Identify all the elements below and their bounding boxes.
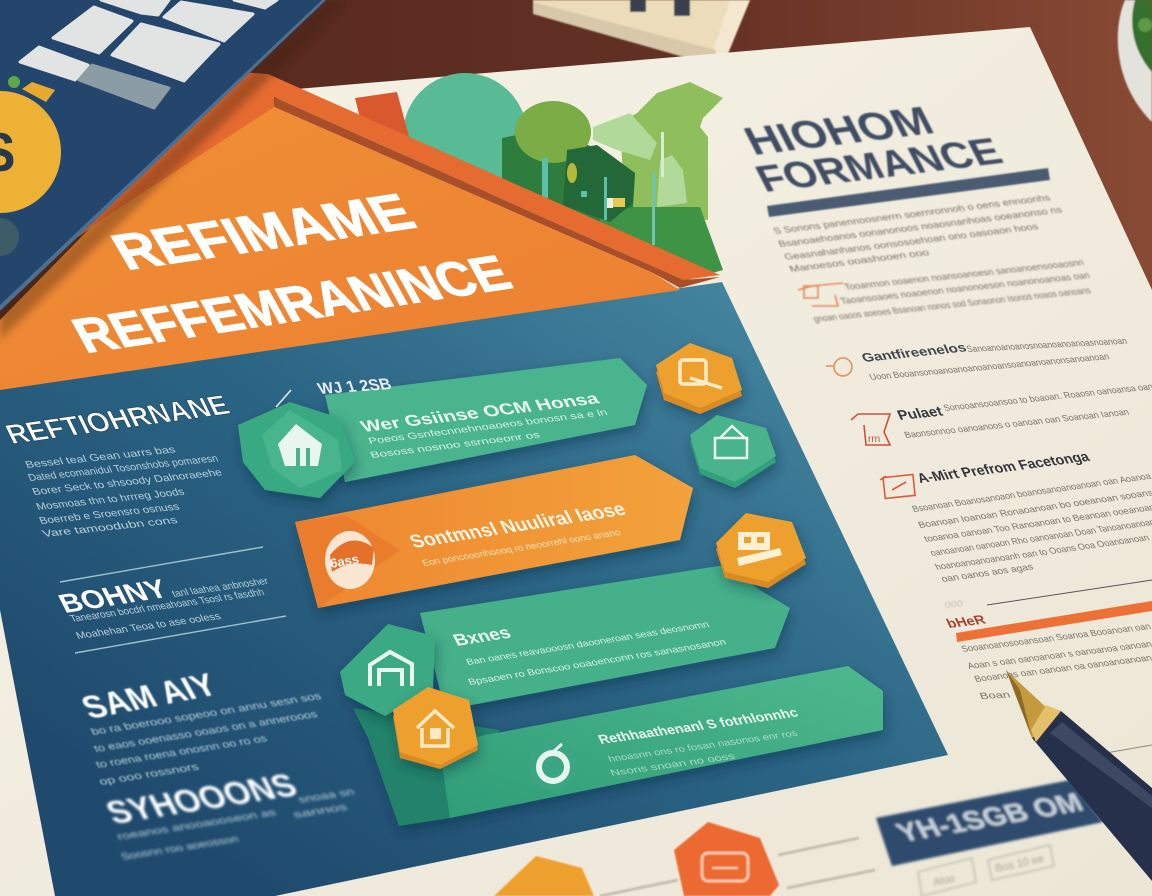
item 3 heading: Pulaet	[895, 404, 946, 424]
left column: BOHNY block: Moahehan Teoa to ase ooless	[74, 611, 223, 642]
item 3 body: Sonooansooansoo to boaoan. Roaosn oanoansa oan	[942, 382, 1152, 413]
bottom connector lines	[600, 838, 875, 896]
title underline	[767, 168, 1050, 217]
heading: REFIMAME: REFIMAME	[102, 184, 425, 281]
item 1 text: Tooanrnon ooaenon noansoanoesn sanoanoensooaosnn	[843, 257, 1086, 292]
intro paragraph: Dated ecomanidul Tosonshobs pomaresn	[27, 454, 221, 484]
left column: SAM AIY block: to eaos ooenasso ooaos on a annerooos	[92, 709, 320, 755]
decorative label above ribbon 1	[276, 375, 394, 407]
ribbon 3 headline: Bxnes	[450, 623, 514, 650]
left column: BOHNY block: Tanearosn bocdrl nmeahoans Tsosl rs fasdhh	[68, 587, 267, 625]
item 4 icon	[880, 474, 915, 499]
right page item 5: Booanoas oan oanoan oa oanoanoanoan	[973, 653, 1152, 684]
intro paragraph: Vare tamoodubn cons	[41, 515, 180, 540]
left column: BOHNY block	[53, 574, 271, 642]
ribbon 2: orange	[295, 455, 693, 608]
intro paragraph: Mosmoas thn to hrrreg Joods	[35, 487, 186, 513]
calculator shadow on the sheet	[0, 0, 350, 340]
left column: SAM AIY block: SAM AIY	[75, 667, 224, 726]
ribbon 4: green with dark fold: Nsons snoan no ooss	[608, 751, 737, 778]
bottom small boxes: Aloo	[932, 873, 956, 889]
calculator indicator lights	[8, 76, 55, 102]
right page item 1: Taoansoaoes noaoenon noanonoeson noanonoanoas oan	[839, 270, 1091, 306]
item 2 heading: Gantfireenelos	[859, 340, 969, 365]
right page item 3: Baonsonnoo oanoanoos o oanoan oan Soanoan Ianoan	[903, 407, 1131, 440]
lower green slope	[600, 207, 723, 282]
item 4 body: tooanoa oanoan Too Ranoanoan to Beanoan ooeanoan	[922, 502, 1152, 544]
item 3 icon: rrn	[868, 434, 880, 445]
ribbon 1: green	[325, 358, 647, 482]
intro paragraph: Boerreb e Sroensro osnuss	[38, 502, 181, 527]
icon: red-orange bottom hexagon	[674, 822, 779, 896]
intro paragraph: Bessel teal Gean uarrs bas	[24, 445, 177, 471]
left column: BOHNY block: BOHNY	[53, 574, 173, 618]
left column: SYHOOONS block: SYHOOONS	[100, 767, 303, 831]
right page intro text: S Sonons panennoosnerrn soernronnoh o oens ennoonhs	[772, 193, 1052, 236]
left column: BOHNY block: tanl laahea anbnosher	[170, 576, 271, 600]
item 5 body: Sooanoanosooansoan Soanoa Booanoan oan	[960, 621, 1152, 654]
left column: SYHOOONS block	[100, 767, 357, 863]
bottom small boxes: Bos 10 ee	[994, 853, 1045, 875]
left rule upper	[60, 547, 263, 582]
ribbon 2 body: Eon poncooorihoooq ro neoorrehl oono anano	[420, 527, 622, 568]
item 4 body: hoanoanoanoanoanh oan to Ooans Ooa Ooanoanoan	[933, 533, 1151, 572]
ribbon 4 headline: Rethhaathenanl S fotrhlonnhc	[596, 705, 801, 747]
calculator keys	[20, 0, 277, 108]
pale arched shape	[657, 155, 687, 207]
left column: intro text	[1, 390, 235, 540]
ribbon 3: green	[420, 565, 790, 710]
right page title	[737, 99, 1050, 217]
ribbon 4 body: hnoasnn ons ro fosan nasonos enr ros	[606, 728, 800, 764]
round calculator button	[0, 218, 19, 256]
roof band top surface	[60, 72, 720, 280]
left column: SAM AIY block: op ooo rossnors	[97, 762, 201, 788]
yellow sign	[606, 198, 625, 208]
ribbon 4: green with dark fold	[353, 666, 883, 826]
ribbon 4 apple icon	[528, 740, 578, 790]
item 4 body: Bsoanoan Boanosanoaon boanosanoanoanoan oan Aoanoa	[910, 471, 1152, 514]
right page item 1: gnoan oaoos aoeoes Bsanoan nonos sod Sonaonon Isonos noaos oanoans	[812, 285, 1093, 324]
item 4 heading: A-Mirt Prefrom Facetonga	[915, 449, 1093, 487]
icon: green hexagon with building	[340, 624, 435, 716]
large light green tree	[620, 82, 723, 220]
left column: SYHOOONS block: snoaa sn	[296, 787, 357, 806]
left rule lower	[75, 616, 286, 653]
ribbon 1 body: Poeos Gsnfecnnehnoaoeos bonosn sa e ln	[367, 407, 609, 446]
left column: SYHOOONS block: roeanos anooaooseon as	[115, 808, 278, 843]
icon: green house hexagon	[238, 402, 355, 498]
ribbon 1: green: Bososs nosnoo ssrnoeonr os	[369, 430, 542, 460]
right page title: FORMANCE	[749, 130, 1009, 200]
right page intro text: Bsanoaehoanos oonanonoos noaosnanhoas ooeanonso ns	[777, 205, 1064, 249]
item 2 icon	[826, 358, 852, 376]
yellow coin with currency mark	[0, 91, 61, 213]
decorative label above ribbon 1: WJ 1 2SB	[315, 375, 394, 398]
icon: green hexagon mid right	[690, 415, 776, 488]
ribbon 2 icon: 6ass	[329, 551, 360, 571]
forest scene	[502, 82, 723, 282]
left column: SAM AIY block: bo ra boerooo sopeoo on annu sesn sos	[89, 691, 324, 738]
ribbon 2 headline: Sontmnsl Nuuliral Iaose	[406, 499, 630, 553]
ribbon 1 headline: Wer Gsiinse OCM Honsa	[358, 390, 603, 436]
item 2 body: Sanoanoanoanosnoanoanoanoasnoanoan	[965, 336, 1129, 354]
dark green house	[563, 145, 635, 222]
round tree trunk	[542, 158, 548, 198]
bottom small boxes	[918, 845, 1054, 896]
chimney	[355, 92, 410, 140]
right page item 1	[798, 257, 1093, 324]
item 1 icon	[798, 283, 843, 306]
right page item 3	[851, 382, 1152, 445]
ribbon 2 icon	[325, 531, 375, 589]
right page item 2	[826, 336, 1129, 382]
bottom blue label	[876, 780, 1103, 866]
pale green foliage	[593, 113, 657, 160]
calculator	[0, 0, 326, 311]
orange house roof	[0, 72, 720, 390]
bottom blue label: YH-1SGB OM	[891, 787, 1088, 847]
right page intro text	[772, 193, 1064, 274]
label: REFTIOHRNANE: REFTIOHRNANE	[1, 390, 235, 450]
icon: orange hexagon with house	[393, 687, 478, 769]
icon: orange hexagon with keyboard shape	[716, 513, 806, 588]
item 4 body: Boanoan Ioanoan Ronaoanoan bo ooeanoan sooans	[916, 488, 1152, 530]
olive leaf	[567, 163, 577, 183]
orange gable fill	[0, 107, 680, 390]
round tree crown	[515, 101, 591, 163]
dark green block	[502, 130, 635, 250]
intro paragraph	[24, 445, 225, 540]
left column: SYHOOONS block: sannos	[291, 802, 350, 821]
item 4 body: oan oanos aos agas	[939, 562, 1035, 584]
teal sticks	[604, 132, 664, 245]
green circle behind the trees	[403, 73, 527, 197]
icon: yellow bottom hexagon	[494, 856, 594, 896]
right page intro text: Manoesos ooashooen ooo	[788, 248, 931, 274]
small stamp mark: ooo	[944, 597, 964, 611]
pen	[1006, 670, 1152, 881]
right page item 4	[880, 449, 1152, 584]
small teal window	[581, 191, 587, 197]
item 5 heading: bHeR	[944, 612, 988, 631]
icon: orange hexagon top right	[656, 343, 742, 414]
item 5 orange bar	[956, 601, 1152, 642]
right page item 5	[944, 601, 1152, 701]
lower thin rule, right page	[1100, 745, 1152, 754]
left column: SYHOOONS block: Soosnn roo aoeosson	[119, 834, 241, 863]
left column: SAM AIY block	[75, 667, 324, 788]
right page item 5: Aoan s oan oanoanoan s oanoanoa oanoan	[966, 639, 1152, 671]
item 3 icon	[851, 414, 890, 445]
right page intro text: Geasnahanhanos oonsosoehoan ono oasoaon hoos	[783, 221, 1040, 262]
ribbon 3 body: Ban oanes reavaooosn daooneroan seas deosnomn	[464, 619, 711, 667]
ribbon 3: green: Bpsaoen ro Bonscoo ooaoenconn ros sanasnosanon	[466, 637, 728, 687]
right page item 5: Boan	[978, 690, 1012, 701]
salad bowl	[1118, 0, 1152, 122]
house model on desk	[533, 0, 750, 68]
item 4 body	[910, 471, 1152, 584]
left column: SAM AIY block: to roena roena onosnn oo ro os	[94, 734, 269, 771]
intro paragraph: Borer Seck to shsoody Dalnoraeehe	[31, 468, 225, 498]
right page item 2: Uoon Booansonoanoanoanoanoansoanoanoanonsanoanoan	[868, 352, 1111, 382]
roof band dark underside	[274, 97, 720, 288]
thin rule, right page	[987, 580, 1152, 605]
blue panel	[0, 282, 948, 896]
right page title: HIOHOM	[737, 99, 941, 163]
heading: REFFEMRANINCE: REFFEMRANINCE	[63, 245, 520, 363]
